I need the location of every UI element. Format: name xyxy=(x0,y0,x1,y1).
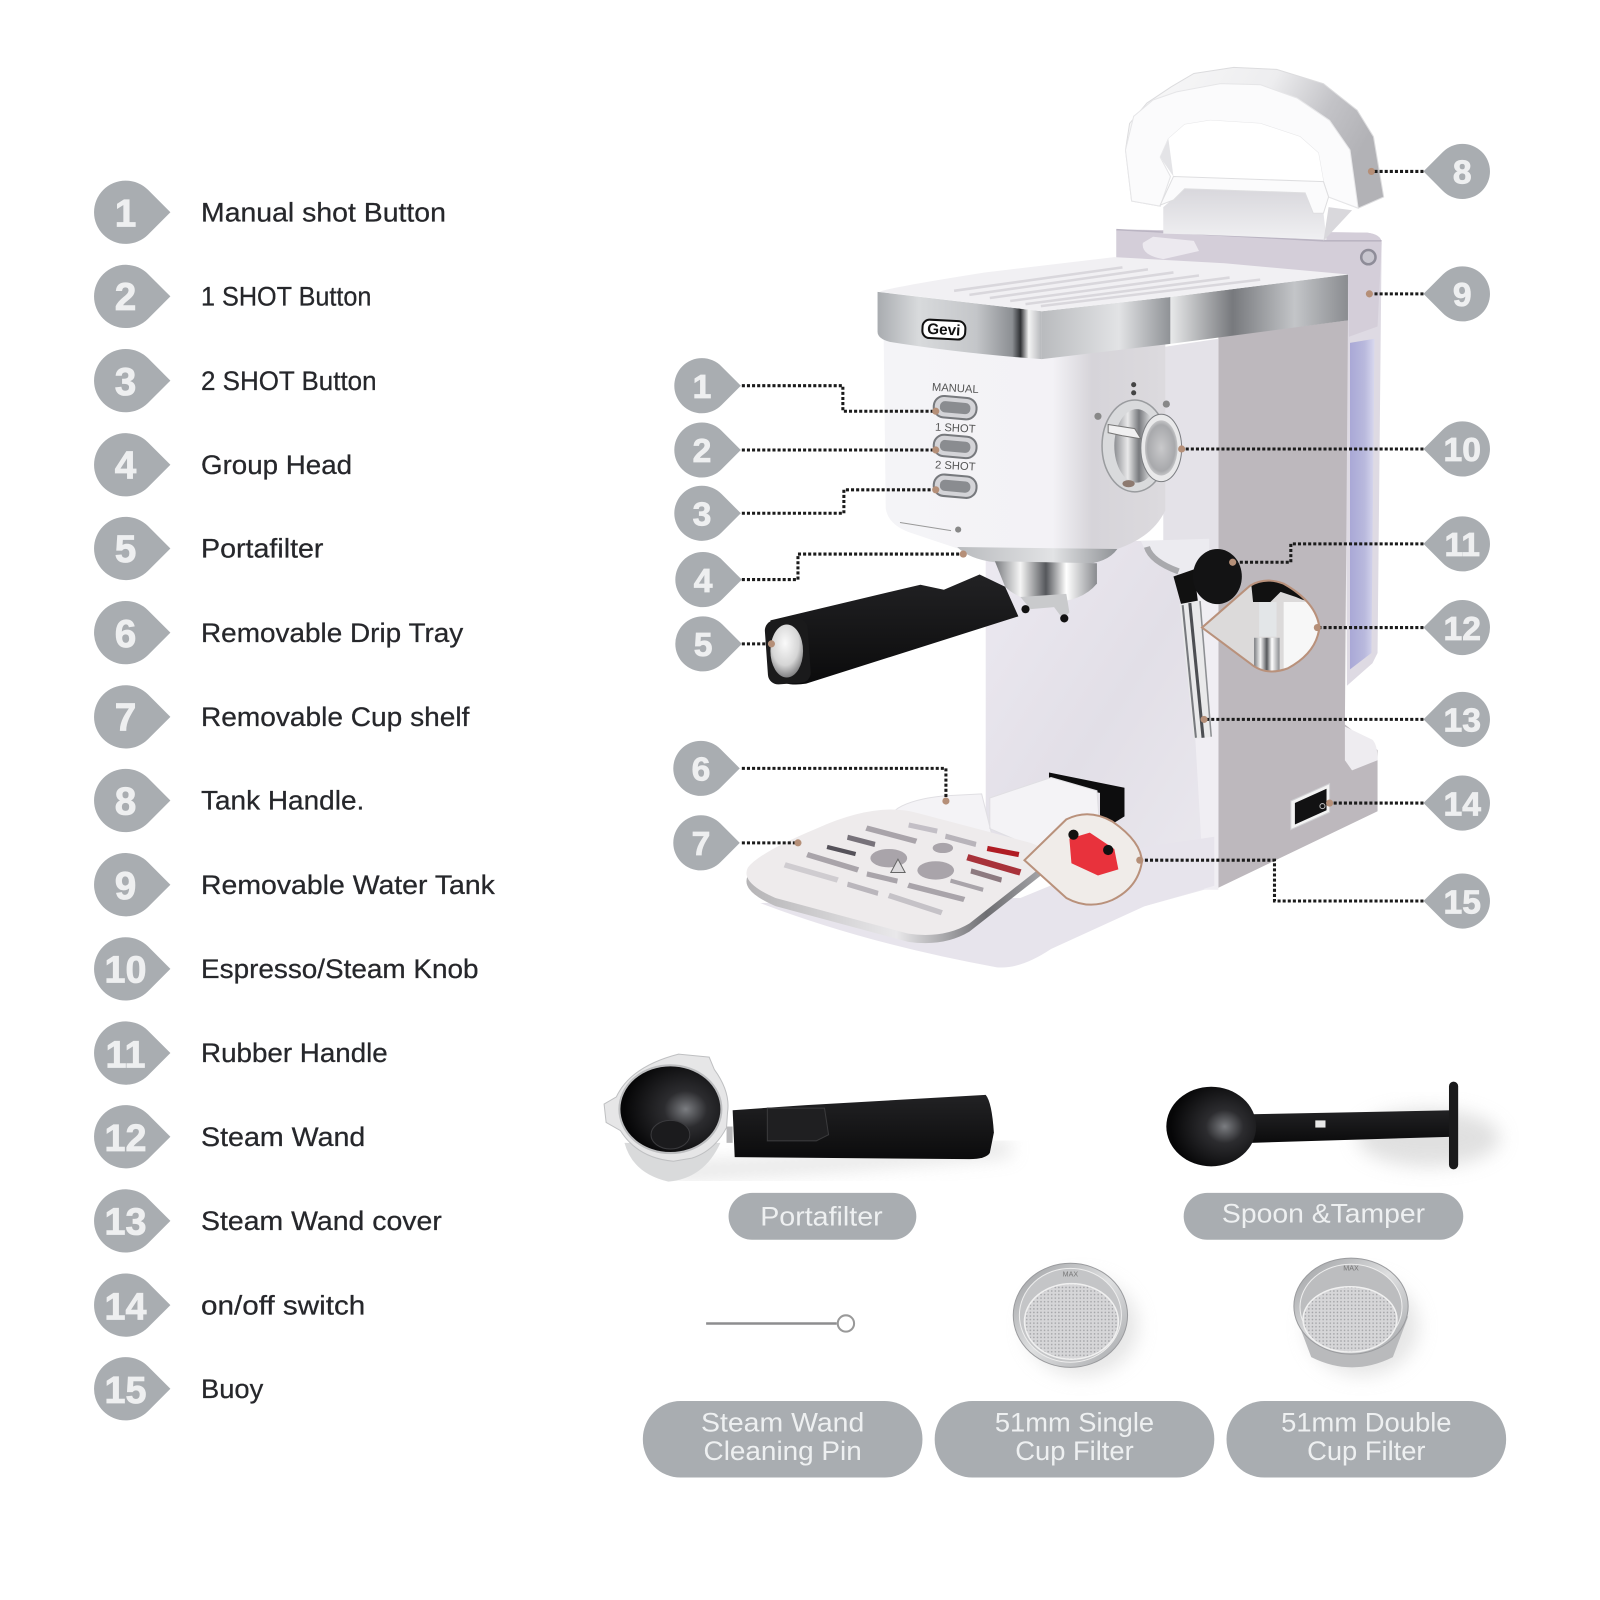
part 12: 12 xyxy=(105,1117,147,1159)
pill: double cup filter: Cup Filter xyxy=(1307,1436,1426,1466)
callout badges right: 8 xyxy=(1453,155,1472,192)
part 10 xyxy=(94,937,479,1001)
part 2: 2 xyxy=(115,276,136,319)
part 12: Steam Wand xyxy=(201,1122,365,1152)
handle front band xyxy=(1126,84,1358,208)
callout badges left: 7 xyxy=(692,826,710,863)
part 4: 4 xyxy=(115,445,137,488)
handle back band xyxy=(1126,67,1384,208)
part 9: Removable Water Tank xyxy=(201,870,496,900)
part 3: 2 SHOT Button xyxy=(201,366,377,396)
part 6: Removable Drip Tray xyxy=(201,618,464,648)
callout badges left: 5 xyxy=(694,627,712,664)
part 7: 7 xyxy=(115,697,136,740)
on off switch xyxy=(1291,784,1330,830)
callout badges right: 11 xyxy=(1444,527,1480,564)
part 2 xyxy=(94,265,371,328)
part 13: Steam Wand cover xyxy=(201,1206,442,1236)
tank handle xyxy=(1126,67,1384,241)
accessory: double cup filter: MAX xyxy=(1343,1264,1359,1272)
control buttons: 2 SHOT xyxy=(935,459,976,473)
column chamfer xyxy=(1194,541,1218,890)
callout badges right: 9 xyxy=(1453,277,1472,314)
part 4: Group Head xyxy=(201,450,352,480)
chrome band xyxy=(878,274,1348,359)
part 14 xyxy=(94,1273,365,1337)
callout anchor dots xyxy=(768,168,1375,864)
callout badges left: 4 xyxy=(694,563,713,600)
part 1 xyxy=(94,181,446,244)
accessory: spoon and tamper xyxy=(1166,1082,1500,1169)
callout badges right: 10 xyxy=(1444,432,1481,469)
part 5: 5 xyxy=(115,528,136,571)
callout badges right: 12 xyxy=(1444,611,1481,648)
panel: parts list xyxy=(94,181,496,1420)
part 14: on/off switch xyxy=(201,1290,365,1320)
part 13 xyxy=(94,1189,442,1253)
accessory: double cup filter xyxy=(1294,1258,1418,1376)
part 15: 15 xyxy=(105,1369,147,1411)
part 4 xyxy=(94,433,352,496)
part 5: Portafilter xyxy=(201,534,324,564)
part 7: Removable Cup shelf xyxy=(201,702,470,732)
pill: portafilter xyxy=(729,1193,916,1240)
handle foot xyxy=(1160,177,1329,213)
handle foot shade xyxy=(1163,189,1327,240)
pill: single cup filter: 51mm Single xyxy=(995,1408,1154,1438)
callout badges left: 2 xyxy=(693,433,711,470)
part 14: 14 xyxy=(105,1285,147,1327)
drain opening xyxy=(1049,772,1124,832)
pill: double cup filter xyxy=(1227,1401,1506,1478)
part 5 xyxy=(94,517,324,580)
part 8: Tank Handle. xyxy=(201,786,364,816)
callout: steam wand detail xyxy=(1200,580,1320,672)
part 10: 10 xyxy=(105,949,147,991)
callout badges left: 6 xyxy=(692,752,710,789)
part 9 xyxy=(94,853,496,916)
portafilter handle xyxy=(764,574,1018,685)
pill: cleaning pin xyxy=(643,1401,922,1478)
pill: spoon and tamper: Spoon &Tamper xyxy=(1222,1198,1425,1228)
machine right side and base xyxy=(1218,320,1378,888)
front column xyxy=(986,541,1218,906)
part 3: 3 xyxy=(115,361,136,404)
upper side panel xyxy=(1163,339,1218,551)
callout: buoy detail xyxy=(1024,814,1142,905)
portafilter basket xyxy=(995,561,1097,622)
brew head housing xyxy=(884,337,1165,549)
part 11: Rubber Handle xyxy=(201,1038,388,1068)
callout badges right: 15 xyxy=(1444,884,1481,921)
control buttons: 1 SHOT xyxy=(935,422,976,436)
drip tray base xyxy=(760,837,1214,968)
callout badges right: 14 xyxy=(1444,786,1481,823)
part 7 xyxy=(94,685,470,748)
callout badges left: 1 xyxy=(693,369,711,406)
pill: spoon and tamper xyxy=(1184,1193,1463,1240)
pill: portafilter: Portafilter xyxy=(760,1202,883,1232)
brand logo: Gevi xyxy=(927,321,961,340)
part 2: 1 SHOT Button xyxy=(201,282,371,312)
callout badges left xyxy=(673,358,742,870)
pill: double cup filter: 51mm Double xyxy=(1281,1408,1452,1438)
part 15 xyxy=(94,1357,264,1420)
removable drip tray xyxy=(888,778,1100,855)
part 15: Buoy xyxy=(201,1374,264,1404)
espresso steam knob xyxy=(1094,382,1182,492)
callout badges left: 3 xyxy=(693,497,711,534)
part 1: 1 xyxy=(115,193,136,236)
cup shelf xyxy=(746,809,1047,943)
callout badges right xyxy=(1423,144,1490,929)
accessory: single cup filter xyxy=(1013,1263,1138,1376)
callout badges right: 13 xyxy=(1444,703,1481,740)
pill: single cup filter xyxy=(935,1401,1214,1478)
accessory: steam wand cleaning pin xyxy=(706,1315,854,1332)
part 11 xyxy=(94,1021,388,1085)
part 8 xyxy=(94,769,364,832)
base ledge highlight xyxy=(1345,727,1378,770)
part 13: 13 xyxy=(105,1201,147,1243)
part 1: Manual shot Button xyxy=(201,197,446,227)
illustration: espresso machine xyxy=(673,67,1490,968)
handle opening xyxy=(1160,120,1323,182)
pill: cleaning pin: Steam Wand xyxy=(701,1408,864,1438)
part 8: 8 xyxy=(115,780,136,823)
pill: single cup filter: Cup Filter xyxy=(1015,1436,1134,1466)
water tank xyxy=(1116,230,1382,686)
part 6: 6 xyxy=(115,613,136,656)
steam wand xyxy=(1141,539,1212,739)
part 3 xyxy=(94,349,377,412)
top cover with ribs xyxy=(880,257,1349,311)
part 6 xyxy=(94,601,464,664)
part 10: Espresso/Steam Knob xyxy=(201,954,479,984)
control buttons: MANUAL xyxy=(932,382,979,396)
callout lines xyxy=(742,171,1423,901)
part 12 xyxy=(94,1105,365,1168)
part 9: 9 xyxy=(115,865,136,908)
accessory: single cup filter: MAX xyxy=(1063,1271,1078,1279)
group head xyxy=(957,547,1117,564)
rubber handle xyxy=(1193,549,1242,604)
pill: cleaning pin: Cleaning Pin xyxy=(704,1436,862,1466)
part 11: 11 xyxy=(106,1033,145,1075)
control buttons xyxy=(900,382,979,533)
accessory: portafilter xyxy=(604,1054,1010,1182)
